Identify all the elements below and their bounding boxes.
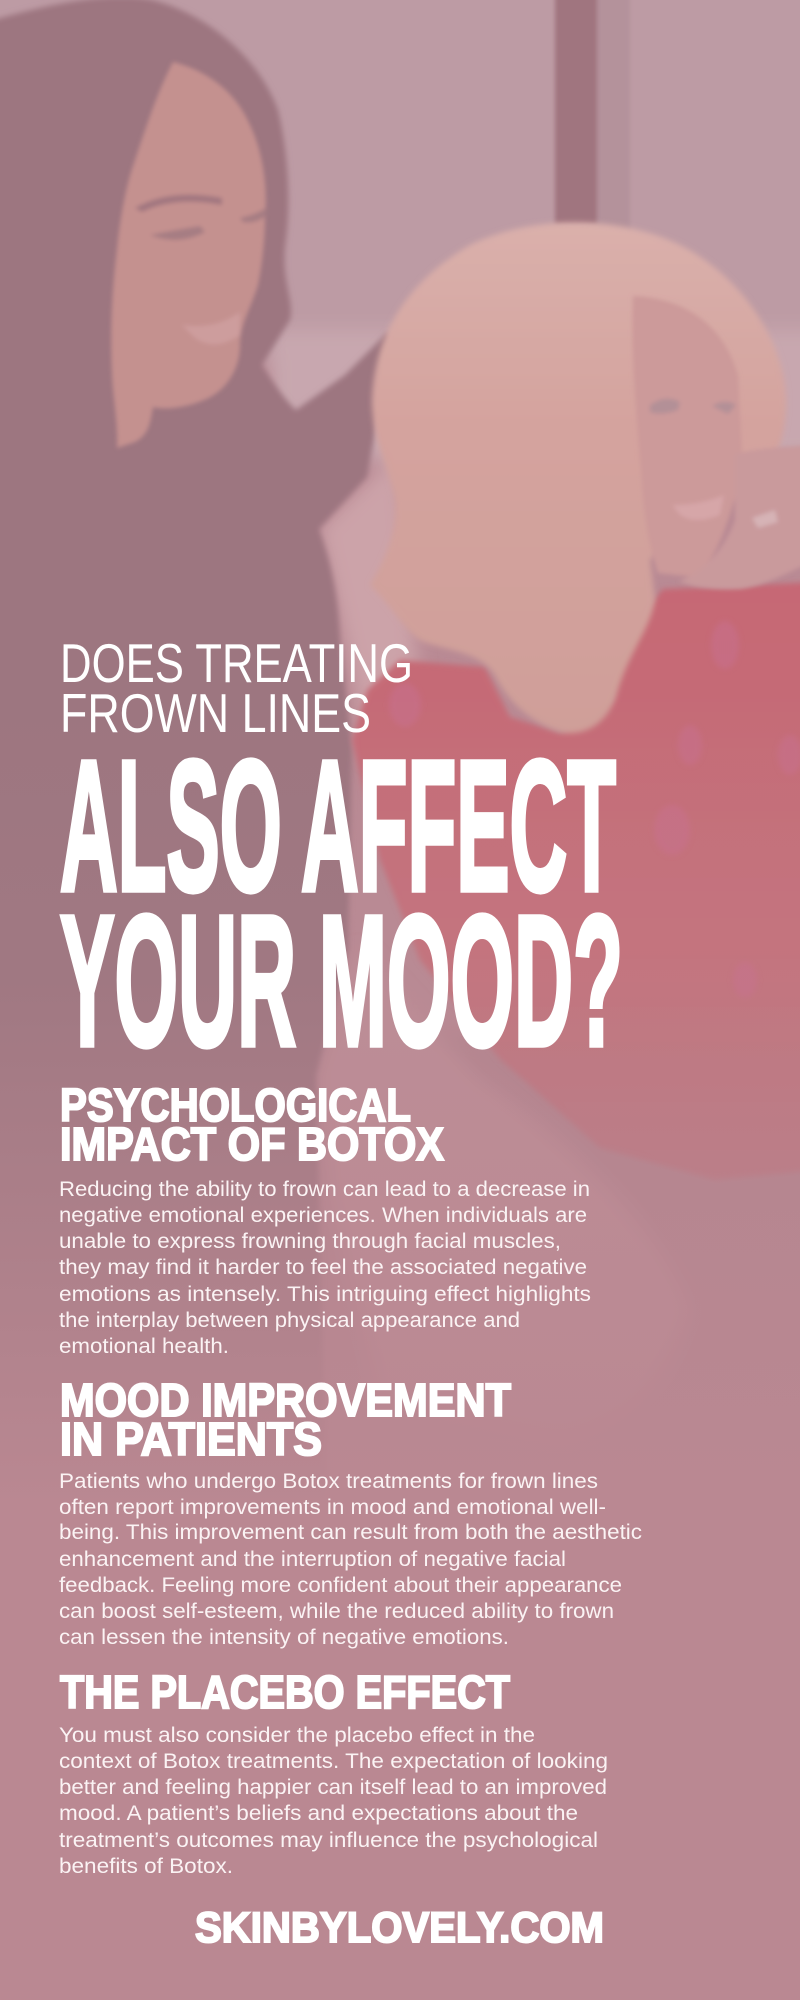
title bbox=[60, 633, 623, 1085]
body text: treatment’s outcomes may influence the psychological bbox=[59, 1829, 598, 1852]
title line: frown lines: FROWN LINES bbox=[60, 683, 371, 744]
body text: benefits of Botox. bbox=[59, 1855, 233, 1878]
body text: can lessen the intensity of negative emotions. bbox=[59, 1626, 509, 1649]
body text: better and feeling happier can itself lead to an improved bbox=[59, 1776, 607, 1799]
fade to solid rose at bottom bbox=[0, 700, 800, 1510]
body text: they may find it harder to feel the associated negative bbox=[59, 1256, 587, 1279]
body text bbox=[59, 1178, 591, 1358]
woman right: face and hand bbox=[632, 296, 800, 589]
body text: emotions as intensely. This intriguing effect highlights bbox=[59, 1283, 591, 1306]
body text: mood. A patient’s beliefs and expectations about the bbox=[59, 1802, 578, 1825]
section: the placebo effect bbox=[59, 1666, 608, 1878]
section: mood improvement in patients bbox=[59, 1374, 642, 1649]
red top hearts bbox=[389, 621, 800, 998]
woman left: hair and dark top bbox=[0, 0, 392, 1650]
heading line 2: IMPACT OF BOTOX bbox=[60, 1118, 444, 1170]
heading: MOOD IMPROVEMENT bbox=[60, 1374, 511, 1426]
body text: Patients who undergo Botox treatments for frown lines bbox=[59, 1470, 598, 1493]
body text: Reducing the ability to frown can lead to a decrease in bbox=[59, 1178, 590, 1201]
body text bbox=[59, 1470, 642, 1649]
title line: does treating: DOES TREATING bbox=[60, 633, 413, 694]
body text: context of Botox treatments. The expectation of looking bbox=[59, 1750, 608, 1773]
body text: often report improvements in mood and emotional well- bbox=[59, 1496, 606, 1519]
body text: emotional health. bbox=[59, 1335, 229, 1358]
woman right: red top bbox=[352, 581, 800, 1180]
woman right: blonde hair bbox=[370, 222, 786, 733]
heading: PSYCHOLOGICAL bbox=[60, 1079, 411, 1131]
woman left: face bbox=[111, 62, 266, 448]
footer url: SKINBYLOVELY.COM bbox=[195, 1904, 604, 1952]
window frame bbox=[555, 0, 630, 240]
body text: enhancement and the interruption of negative facial bbox=[59, 1548, 566, 1571]
heading: THE PLACEBO EFFECT bbox=[60, 1666, 510, 1718]
body text: unable to express frowning through facial muscles, bbox=[59, 1230, 561, 1253]
body text: negative emotional experiences. When individuals are bbox=[59, 1204, 587, 1227]
section: psychological impact of botox bbox=[59, 1079, 591, 1358]
heading line 2: IN PATIENTS bbox=[60, 1413, 322, 1465]
body text: feedback. Feeling more confident about their appearance bbox=[59, 1574, 622, 1597]
body text: can boost self-esteem, while the reduced ability to frown bbox=[59, 1600, 614, 1623]
body text: being. This improvement can result from both the aesthetic bbox=[59, 1521, 642, 1544]
body text: You must also consider the placebo effect in the bbox=[59, 1724, 535, 1747]
body text: the interplay between physical appearance and bbox=[59, 1309, 520, 1332]
body text bbox=[59, 1724, 608, 1878]
